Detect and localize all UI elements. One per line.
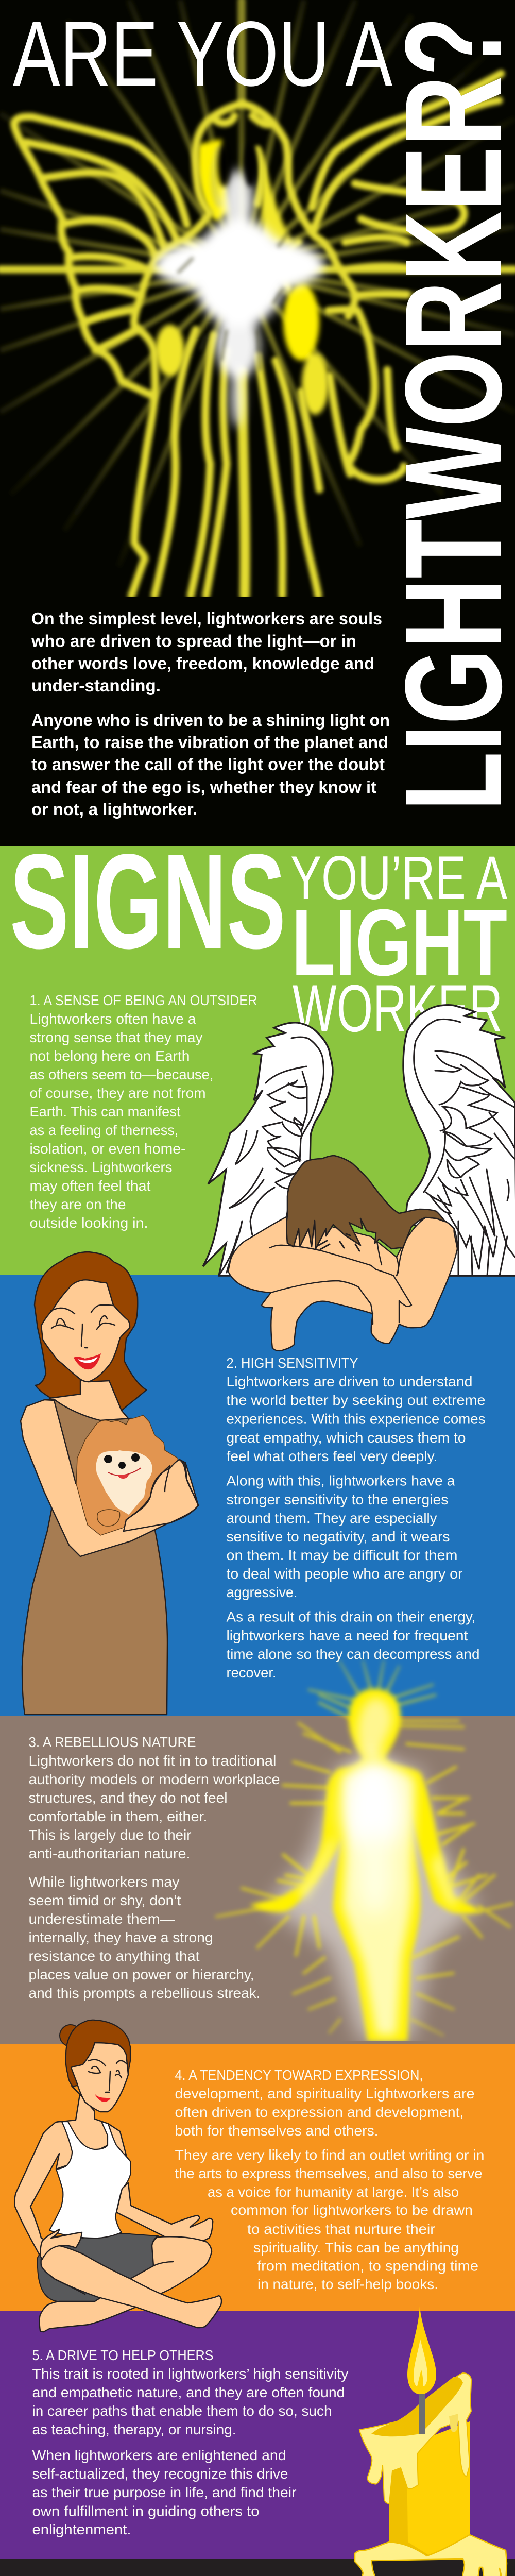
text block: sign 4: both for themselves and others.: [175, 2123, 378, 2139]
illustration: smiling woman holding a dog: [21, 1252, 198, 1715]
body and arms: [228, 1216, 457, 1351]
text block: sign 5: 5. A DRIVE TO HELP OTHERS: [32, 2347, 213, 2363]
text block: sign 1: as a feeling of therness,: [30, 1122, 178, 1138]
dog eyes: [104, 1455, 112, 1463]
text block: sign 3: This is largely due to their: [29, 1827, 192, 1843]
text block: sign 4: in nature, to self-help books.: [258, 2276, 438, 2292]
far leg and foot: [39, 2236, 212, 2332]
text block: sign 2: feel what others feel very deeply.: [227, 1448, 438, 1464]
dress: [22, 1399, 167, 1715]
yellow inner glow: [198, 139, 229, 222]
robe folds: [154, 330, 196, 596]
text block: sign 3: seem timid or shy, don’t: [29, 1892, 181, 1908]
text block: sign 5: as teaching, therapy, or nursing.: [32, 2421, 236, 2437]
text block: sign 1: they are on the: [30, 1196, 126, 1212]
text block: intro: On the simplest level, lightworkers are souls: [31, 609, 382, 628]
text block: sign 2: recover.: [227, 1665, 276, 1681]
wick: [419, 2394, 425, 2434]
left wing: [203, 1023, 333, 1276]
illustration: melting candle: [355, 2306, 507, 2576]
text block: sign 3: 3. A REBELLIOUS NATURE: [29, 1734, 196, 1750]
text block: sign 4: [175, 2067, 484, 2292]
text block: sign 1: sickness. Lightworkers: [30, 1159, 172, 1175]
text block: sign 3: While lightworkers may: [29, 1874, 179, 1890]
chest and neck: [49, 1377, 131, 1425]
text block: sign 3: anti-authoritarian nature.: [29, 1845, 191, 1861]
text block: sign 2: As a result of this drain on their energy,: [227, 1608, 476, 1625]
text block: sign 4: 4. A TENDENCY TOWARD EXPRESSION,: [175, 2067, 423, 2083]
text block: sign 1: 1. A SENSE OF BEING AN OUTSIDER: [30, 992, 258, 1008]
panel: green sign 1 background: [0, 846, 515, 1275]
text block: sign 5: When lightworkers are enlightened and: [32, 2447, 286, 2463]
text block: sign 2: around them. They are especially: [227, 1510, 437, 1526]
left arm and shoulders: [14, 2094, 126, 2259]
text block: sign 5: [32, 2347, 348, 2537]
far arm: [116, 2183, 213, 2245]
text block: sign 3: internally, they have a strong: [29, 1929, 213, 1945]
text block: sign 3: structures, and they do not feel: [29, 1790, 228, 1806]
text block: sign 4: often driven to expression and development,: [175, 2104, 464, 2120]
illustration: glowing yellow angel with rays: [0, 0, 515, 596]
text block: sign 1: outside looking in.: [30, 1215, 148, 1231]
text block: intro: or not, a lightworker.: [31, 800, 197, 819]
heading: Signs you're a lightworker: [10, 826, 507, 1046]
text block: sign 1: of course, they are not from: [30, 1085, 206, 1101]
heading: Signs you're a lightworker: SIGNS: [10, 826, 286, 977]
text block: intro: who are driven to spread the light—or in: [31, 632, 356, 650]
text block: sign 2: time alone so they can decompress and: [227, 1646, 480, 1662]
dog mouth: [108, 1468, 141, 1476]
eyes, brows, nose: [52, 1323, 115, 1329]
panel: black hero background: [0, 0, 515, 846]
right wing: [403, 1005, 515, 1276]
flame: [407, 2306, 436, 2395]
eyes, brow, nose: [89, 2060, 126, 2066]
text block: sign 2: 2. HIGH SENSITIVITY: [227, 1355, 358, 1371]
panel: orange sign 4 background: [0, 2044, 515, 2311]
panel: blue sign 2 background: [0, 1275, 515, 1716]
text block: sign 1: may often feel that: [30, 1178, 151, 1194]
near leg and foot: [41, 2246, 221, 2328]
text block: sign 5: as their true purpose in life, and find their: [32, 2484, 297, 2500]
wax top dark rim: [359, 2373, 471, 2503]
text block: sign 1: Lightworkers often have a: [30, 1011, 196, 1027]
text block: sign 2: to deal with people who are angry or: [227, 1566, 462, 1582]
panel: footer background: [0, 2559, 515, 2576]
holding hand: [124, 1460, 198, 1531]
illustration: glowing human figure: [216, 1662, 512, 2041]
text block: sign 2: stronger sensitivity to the energies: [227, 1492, 448, 1507]
main rays: [0, 266, 515, 273]
left wing: [14, 117, 187, 397]
dog paw: [97, 1510, 120, 1526]
text block: sign 1: strong sense that they may: [30, 1029, 203, 1045]
text block: intro: under-standing.: [31, 676, 161, 695]
text block: sign 5: and empathetic nature, and they are often found: [32, 2384, 345, 2400]
face: [71, 2043, 128, 2112]
text block: sign 5: own fulfillment in guiding others to: [32, 2503, 260, 2519]
back hair: [35, 1252, 146, 1413]
text block: intro: and fear of the ego is, whether they know it: [31, 777, 376, 796]
text block: sign 4: spirituality. This can be anything: [253, 2240, 459, 2256]
text block: sign 2: Lightworkers are driven to understand: [227, 1374, 473, 1389]
text block: sign 5: enlightenment.: [32, 2521, 131, 2537]
text block: sign 3: and this prompts a rebellious streak.: [29, 1985, 261, 2001]
text block: sign 2: lightworkers have a need for frequent: [227, 1628, 468, 1643]
hair: [66, 2020, 130, 2094]
text block: sign 2: sensitive to negativity, and it wears: [227, 1529, 450, 1545]
white core glow: [154, 237, 324, 294]
text block: sign 3: underestimate them—: [29, 1911, 175, 1927]
illustration: meditating woman: [14, 2020, 221, 2332]
candle body: [389, 2421, 470, 2556]
text block: sign 5: self-actualized, they recognize this drive: [32, 2466, 288, 2482]
text block: sign 4: They are very likely to find an outlet writing or in: [175, 2147, 484, 2163]
lips: [95, 2094, 111, 2102]
text block: sign 5: in career paths that enable them to do so, such: [32, 2403, 332, 2419]
text block: intro: other words love, freedom, knowledge and: [31, 654, 374, 673]
arm: [21, 1400, 198, 1556]
text block: sign 2: [227, 1355, 485, 1681]
text block: sign 2: experiences. With this experience comes: [227, 1411, 485, 1427]
figure silhouette: [250, 1689, 483, 2041]
text block: sign 1: not belong here on Earth: [30, 1048, 190, 1064]
title: Are you a: ARE YOU A: [13, 2, 392, 105]
text block: sign 1: as others seem to—because,: [30, 1066, 213, 1082]
text block: sign 3: places value on power or hierarchy,: [29, 1967, 254, 1982]
text block: sign 4: common for lightworkers to be drawn: [231, 2202, 473, 2218]
hair: [286, 1156, 445, 1249]
text block: sign 2: on them. It may be difficult for them: [227, 1547, 457, 1563]
text block: sign 1: isolation, or even home-: [30, 1141, 186, 1157]
hand on hip: [40, 2229, 82, 2259]
text block: sign 3: [29, 1734, 280, 2001]
wax inner surface: [371, 2377, 463, 2436]
far hip and shorts: [38, 2233, 158, 2301]
hair bun: [60, 2025, 81, 2046]
head and veil: [195, 104, 355, 316]
wax drip highlights: [449, 2414, 458, 2432]
text block: sign 1: [30, 992, 258, 1231]
tank top: [49, 2122, 131, 2238]
text block: sign 4: as a voice for humanity at large. It’s also: [208, 2184, 459, 2200]
text block: sign 2: great empathy, which causes them to: [227, 1430, 466, 1446]
panel: brown sign 3 background: [0, 1716, 515, 2044]
text block: sign 3: Lightworkers do not fit in to traditional: [29, 1753, 276, 1769]
illustration: crying angel with white wings: [203, 1005, 515, 1351]
text block: sign 5: This trait is rooted in lightworkers’ high sensitivity: [32, 2366, 348, 2382]
text block: sign 3: resistance to anything that: [29, 1948, 200, 1964]
text block: sign 4: from meditation, to spending time: [257, 2258, 478, 2274]
text block: sign 2: the world better by seeking out extreme: [227, 1392, 485, 1408]
text block: sign 3: comfortable in them, either.: [29, 1808, 208, 1824]
panel: purple sign 5 background: [0, 2311, 515, 2559]
wax base: [355, 2535, 507, 2576]
text block: intro: Anyone who is driven to be a shining light on: [31, 710, 390, 730]
text block: sign 2: aggressive.: [227, 1584, 298, 1600]
text block: sign 2: Along with this, lightworkers have a: [227, 1472, 455, 1489]
text block: sign 4: the arts to express themselves, and also to serve: [175, 2165, 482, 2181]
text block: intro: [31, 609, 390, 819]
text block: intro: Earth, to raise the vibration of the planet and: [31, 733, 388, 752]
text block: intro: to answer the call of the light over the doubt: [31, 755, 385, 774]
dog body: [76, 1415, 181, 1535]
face: [41, 1280, 130, 1382]
text block: sign 3: authority models or modern workplace: [29, 1771, 280, 1787]
dog face and chest: [96, 1450, 152, 1515]
text block: sign 4: to activities that nurture their: [247, 2221, 435, 2237]
text block: sign 1: Earth. This can manifest: [30, 1104, 181, 1120]
right wing: [312, 74, 501, 207]
lips: [74, 1353, 101, 1369]
text block: sign 4: development, and spirituality Lightworkers are: [175, 2086, 475, 2102]
